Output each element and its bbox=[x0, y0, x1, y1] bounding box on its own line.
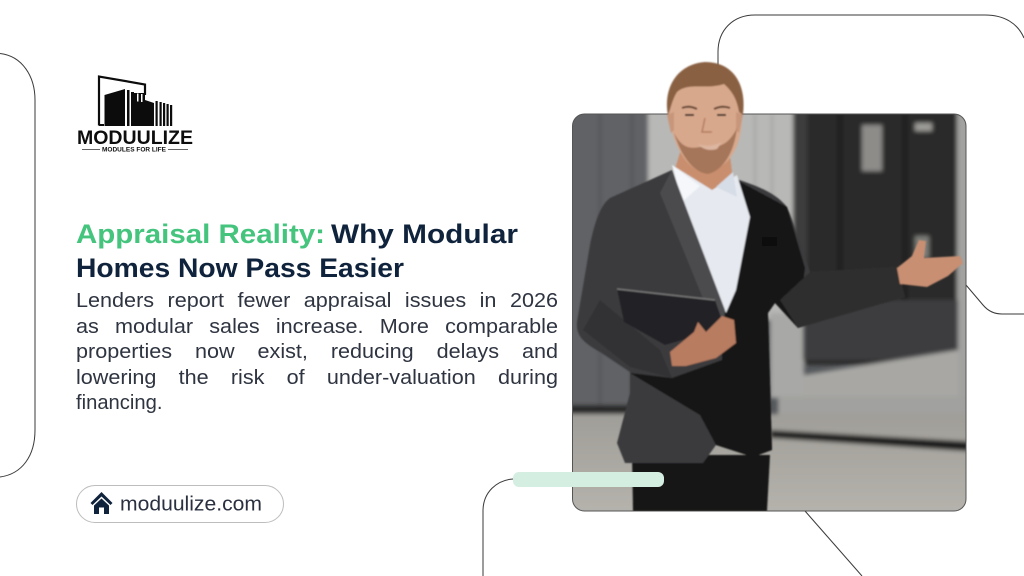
sleeve shading bbox=[780, 267, 905, 328]
head bbox=[668, 78, 742, 173]
accent bar bbox=[513, 472, 664, 487]
clipboard bbox=[617, 289, 723, 345]
icon: home bbox=[90, 492, 112, 514]
trousers bbox=[632, 455, 770, 511]
decorative outline: top right frame bbox=[718, 15, 1024, 70]
left hand bbox=[670, 316, 736, 366]
decorative outline: left bracket bbox=[0, 54, 35, 477]
eyes and brows bbox=[682, 107, 730, 109]
photo panel: man presenting modular home bbox=[560, 62, 980, 524]
right hand bbox=[897, 240, 963, 287]
body text: financing. bbox=[76, 392, 162, 414]
website address: moduulize.com bbox=[120, 494, 262, 516]
logo: Moduulize bbox=[77, 76, 193, 154]
decorative outline: bottom right line bbox=[805, 511, 862, 576]
logo icon: modular building bbox=[99, 76, 172, 126]
man in suit bbox=[577, 62, 963, 511]
pocket square bbox=[762, 237, 777, 246]
body text: lowering the risk of under-valuation during bbox=[76, 367, 558, 389]
jacket bbox=[576, 170, 810, 464]
neck bbox=[675, 152, 732, 190]
photo background: modular building bbox=[573, 114, 966, 510]
body text: Lenders report fewer appraisal issues in 2026 bbox=[76, 290, 558, 312]
heading: Appraisal Reality: bbox=[76, 219, 325, 249]
body text: as modular sales increase. More comparable bbox=[76, 316, 558, 338]
beard bbox=[674, 128, 737, 174]
logo tagline: MODULES FOR LIFE bbox=[102, 148, 166, 154]
hair bbox=[667, 62, 744, 115]
decorative outline: right connector bbox=[966, 285, 1024, 314]
photo frame bbox=[572, 114, 966, 511]
decorative outline: bottom left frame bbox=[483, 479, 513, 576]
body text: properties now exist, reducing delays and bbox=[76, 341, 558, 363]
jacket dark front bbox=[630, 178, 805, 457]
website pill bbox=[76, 486, 284, 522]
heading: Why Modular bbox=[331, 219, 519, 249]
shirt bbox=[672, 165, 750, 313]
logo wordmark: MODUULIZE bbox=[77, 127, 193, 149]
heading bbox=[76, 219, 519, 283]
ears bbox=[667, 112, 743, 133]
heading: Homes Now Pass Easier bbox=[76, 253, 405, 283]
lapel bbox=[660, 172, 726, 317]
body text bbox=[76, 290, 558, 414]
